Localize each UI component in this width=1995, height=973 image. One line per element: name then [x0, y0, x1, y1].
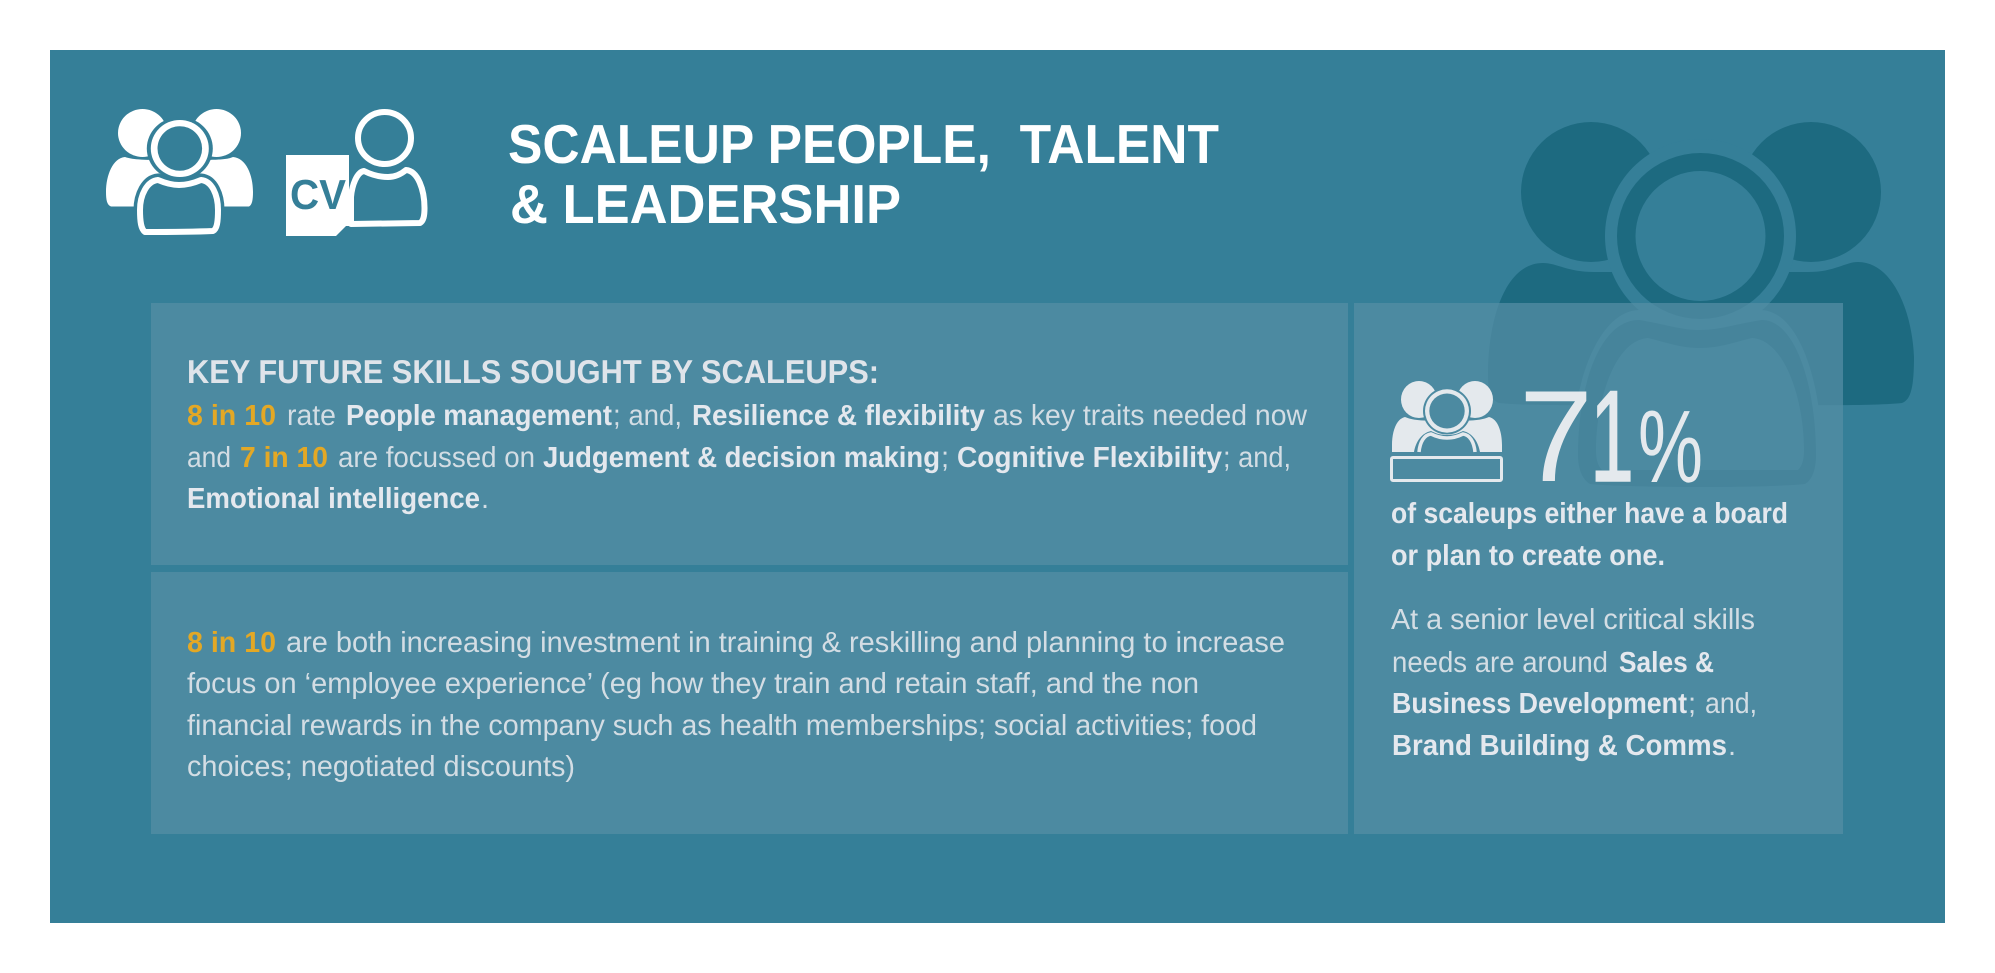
heading: key future skills: KEY FUTURE SKILLS SOUGHT BY SCALEUPS:	[187, 353, 879, 390]
text block: board statement	[1391, 498, 1788, 572]
text block: training investment: choices; negotiated discounts)	[187, 751, 575, 783]
text block: skills ratings: 7 in 10	[240, 442, 328, 474]
text block: skills ratings: Resilience & flexibility	[692, 400, 985, 432]
text block: skills ratings: Emotional intelligence	[187, 483, 480, 515]
panel: training and employee experience	[151, 572, 1348, 834]
big number: 71%: 1	[1590, 363, 1634, 509]
text block: skills ratings: 8 in 10	[187, 400, 276, 432]
text block: senior level skills: .	[1728, 730, 1736, 762]
text block: training investment: 8 in 10	[187, 627, 276, 659]
big number: 71%	[1519, 363, 1703, 509]
text block: skills ratings: rate	[287, 400, 336, 432]
text block: training investment: are both increasing investment in training & reskilling and planning to increase	[286, 627, 1285, 659]
text block: skills ratings: ; and,	[613, 400, 682, 432]
icon: large background people watermark	[1488, 122, 1914, 494]
text block: skills ratings: are focussed on	[338, 442, 535, 474]
text block: senior level skills: and,	[1705, 688, 1757, 720]
text block: senior level skills: Business Development	[1392, 688, 1687, 720]
title: & LEADERSHIP	[510, 173, 901, 235]
text block: skills ratings: and	[187, 442, 231, 474]
big number: 71%: 7	[1519, 363, 1593, 509]
icon: group of people	[106, 109, 253, 232]
big number: 71%: %	[1638, 389, 1703, 504]
text block: board statement: or plan to create one.	[1391, 540, 1665, 572]
text block: skills ratings: Cognitive Flexibility	[957, 442, 1222, 474]
text block: training investment: focus on ‘employee experience’ (eg how they train and retain staff, and the non	[187, 668, 1199, 700]
title: SCALEUP PEOPLE, TALENT	[508, 113, 1219, 175]
icon: CV document and person: CV	[290, 171, 346, 218]
panel: board statistic	[1354, 303, 1843, 834]
text block: board statement: of scaleups either have a board	[1391, 498, 1788, 530]
text block: senior level skills: needs are around	[1392, 647, 1608, 679]
text block: skills ratings: ;	[941, 442, 949, 474]
text block: senior level skills: ;	[1688, 688, 1696, 720]
text block: skills ratings: Judgement & decision making	[543, 442, 940, 474]
text block: training investment	[187, 627, 1285, 783]
text block: senior level skills: At a senior level critical skills	[1391, 604, 1755, 636]
text block: skills ratings: People management	[346, 400, 612, 432]
text block: senior level skills	[1391, 604, 1757, 762]
panel: key future skills	[151, 303, 1348, 565]
text block: skills ratings: .	[481, 483, 489, 515]
icon: board table with people	[1392, 381, 1502, 480]
text block: skills ratings: as key traits needed now	[993, 400, 1308, 432]
text block: skills ratings: ; and,	[1223, 442, 1291, 474]
text block: skills ratings	[187, 400, 1308, 515]
icon: CV document and person	[286, 112, 424, 236]
text block: senior level skills: Sales &	[1619, 647, 1714, 679]
text block: training investment: financial rewards in the company such as health memberships; social activities; food	[187, 710, 1257, 742]
text block: senior level skills: Brand Building & Comms	[1392, 730, 1727, 762]
title	[508, 113, 1219, 235]
